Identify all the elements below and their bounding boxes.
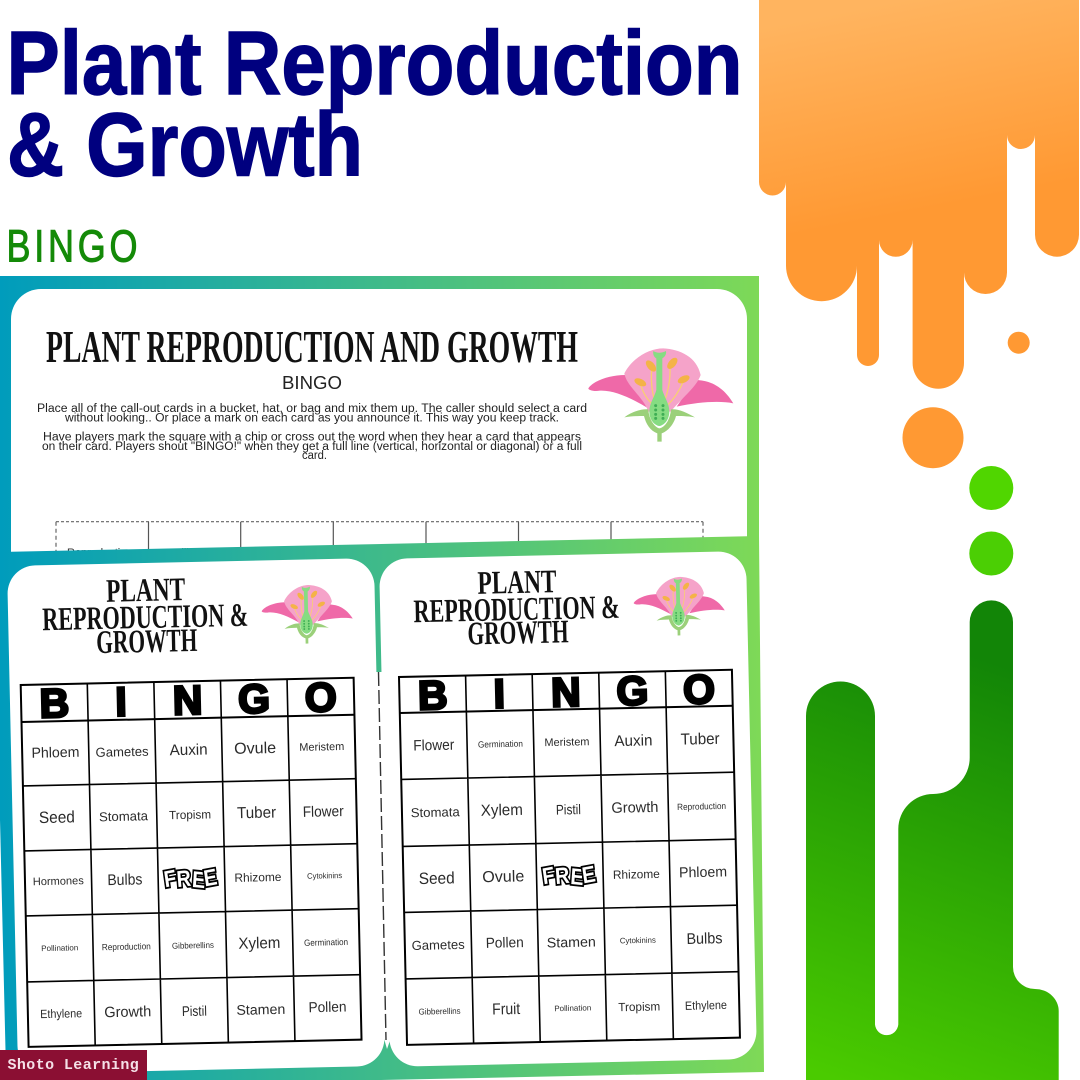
grid words: Pistil [556, 801, 581, 818]
call-out cards table, cropped [56, 522, 703, 560]
grid header letters: N [172, 677, 203, 724]
icon: flower [261, 584, 353, 645]
left card heading [41, 571, 249, 662]
icon: flower cross-section [588, 348, 733, 442]
grid words: Germination [478, 739, 523, 750]
grid words: Gibberellins [172, 940, 214, 951]
grid words [30, 738, 350, 1023]
brand label: Shoto Learning: Shoto Learning [8, 1057, 139, 1074]
grid header letters [39, 674, 337, 727]
instructions text: without looking.. Or place a mark on each card as you announce it. This way you keep track. [64, 412, 559, 424]
grid header letters: I [493, 671, 505, 717]
grid header letters: G [616, 668, 649, 714]
title: Plant Reproduction & Growth: Plant Reproduction [6, 14, 742, 114]
call-out cards table, cropped: Seed [271, 545, 297, 557]
grid words: Pollination [554, 1003, 591, 1013]
grid words: Meristem [544, 736, 590, 749]
grid words: Ovule [482, 868, 525, 886]
grid words: Stomata [411, 804, 461, 820]
call-out cards table, cropped: Pollination [168, 547, 219, 559]
right card heading: REPRODUCTION & [413, 590, 620, 630]
grid words [407, 731, 731, 1020]
grid words: Auxin [169, 741, 208, 759]
grid header letters: B [417, 672, 448, 719]
grid words: Bulbs [686, 930, 723, 948]
grid words: Growth [104, 1003, 151, 1021]
right card heading [413, 563, 620, 654]
grid words: Ethylene [685, 998, 727, 1013]
grid words: Meristem [299, 741, 344, 754]
grid words: Xylem [238, 935, 281, 953]
free space: FREE [162, 864, 219, 894]
call-out cards table, cropped: Reproduction [67, 547, 132, 559]
dashed cut line [378, 672, 386, 1040]
left card heading: GROWTH [96, 623, 198, 661]
grid words: Germination [304, 937, 348, 948]
grid words: Ethylene [40, 1006, 83, 1021]
sheet heading: PLANT REPRODUCTION AND GROWTH [46, 322, 578, 372]
grid words: Hormones [33, 875, 84, 888]
grid header letters: I [115, 679, 127, 725]
grid words: Flower [303, 803, 344, 821]
panel: instructions sheet [11, 289, 747, 589]
grid words: Ovule [234, 740, 276, 758]
left card heading: REPRODUCTION & [42, 598, 249, 638]
green droplets [969, 466, 1013, 576]
grid words: Pistil [182, 1003, 207, 1019]
subtitle: BINGO: BINGO [6, 221, 141, 272]
bingo grid lines [21, 678, 362, 1047]
grid words: Pollen [486, 935, 524, 952]
grid words: Rhizome [234, 870, 282, 885]
grid words: Gametes [411, 937, 465, 953]
white cut gap between cards [375, 672, 392, 1049]
grid words: Pollination [41, 943, 78, 953]
decorative orange paint drip [759, 0, 1079, 389]
instructions text [37, 403, 587, 462]
grid words: Seed [39, 808, 75, 827]
grid words: Reproduction [102, 941, 151, 952]
grid words: Stomata [99, 808, 149, 824]
grid words: Tuber [680, 731, 720, 749]
lower sheet: gradient frame behind bingo cards [0, 536, 764, 1080]
grid words: Phloem [31, 745, 80, 762]
grid header letters: O [304, 674, 337, 721]
free space: FREE [540, 861, 597, 891]
brand label: Shoto Learning [0, 1050, 147, 1080]
grid words: Phloem [679, 864, 727, 881]
grid words: Cytokinins [307, 871, 342, 881]
grid header letters [417, 666, 715, 719]
grid header letters: N [551, 669, 581, 716]
grid words: Xylem [481, 802, 523, 820]
instructions text: on their card. Players shout "BINGO!" when they get a full line (vertical, horizontal or diagonal) or a full [42, 441, 582, 453]
grid words: Auxin [614, 732, 653, 750]
right card heading: GROWTH [467, 614, 569, 652]
grid words: Tuber [237, 804, 277, 822]
grid words: Bulbs [107, 871, 143, 889]
instructions text: card. [302, 450, 327, 462]
right card contents [397, 560, 740, 1045]
sheet subheading: BINGO [282, 373, 342, 393]
left card heading: PLANT [106, 572, 186, 610]
grid words: Fruit [492, 1001, 521, 1019]
bingo grid lines [399, 670, 740, 1045]
title: Plant Reproduction & Growth [6, 14, 742, 196]
instructions text: Place all of the call-out cards in a bucket, hat, or bag and mix them up. The caller should select a card [37, 403, 587, 415]
grid words: Growth [611, 799, 659, 817]
grid words: Rhizome [613, 867, 660, 882]
grid header letters: O [683, 666, 715, 713]
right card heading: PLANT [477, 564, 557, 602]
grid words: Gametes [95, 744, 149, 760]
grid words: Tropism [618, 999, 660, 1014]
grid words: Pollen [308, 999, 347, 1016]
grid words: Stamen [547, 933, 596, 951]
grid words: Seed [419, 869, 455, 888]
grid words: Cytokinins [620, 936, 656, 945]
grid words: Stamen [236, 1001, 286, 1018]
panel: left bingo card [7, 558, 385, 1074]
icon: flower [633, 576, 725, 636]
title: Plant Reproduction & Growth: & Growth [7, 96, 363, 196]
instructions text: Have players mark the square with a chip or cross out the word when they hear a card that appears [43, 432, 581, 444]
grid words: Tropism [169, 807, 211, 822]
orange droplets [902, 332, 1030, 468]
preview panel: gradient frame for the top sheet [0, 276, 759, 566]
grid header letters: G [238, 676, 271, 722]
panel: right bingo card [379, 551, 757, 1067]
grid words: Flower [413, 737, 454, 755]
grid header letters: B [39, 680, 70, 727]
grid words: Reproduction [677, 801, 726, 812]
grid words: Gibberellins [418, 1006, 461, 1017]
decorative green rising shape [806, 600, 1059, 1080]
left card contents [18, 568, 362, 1047]
